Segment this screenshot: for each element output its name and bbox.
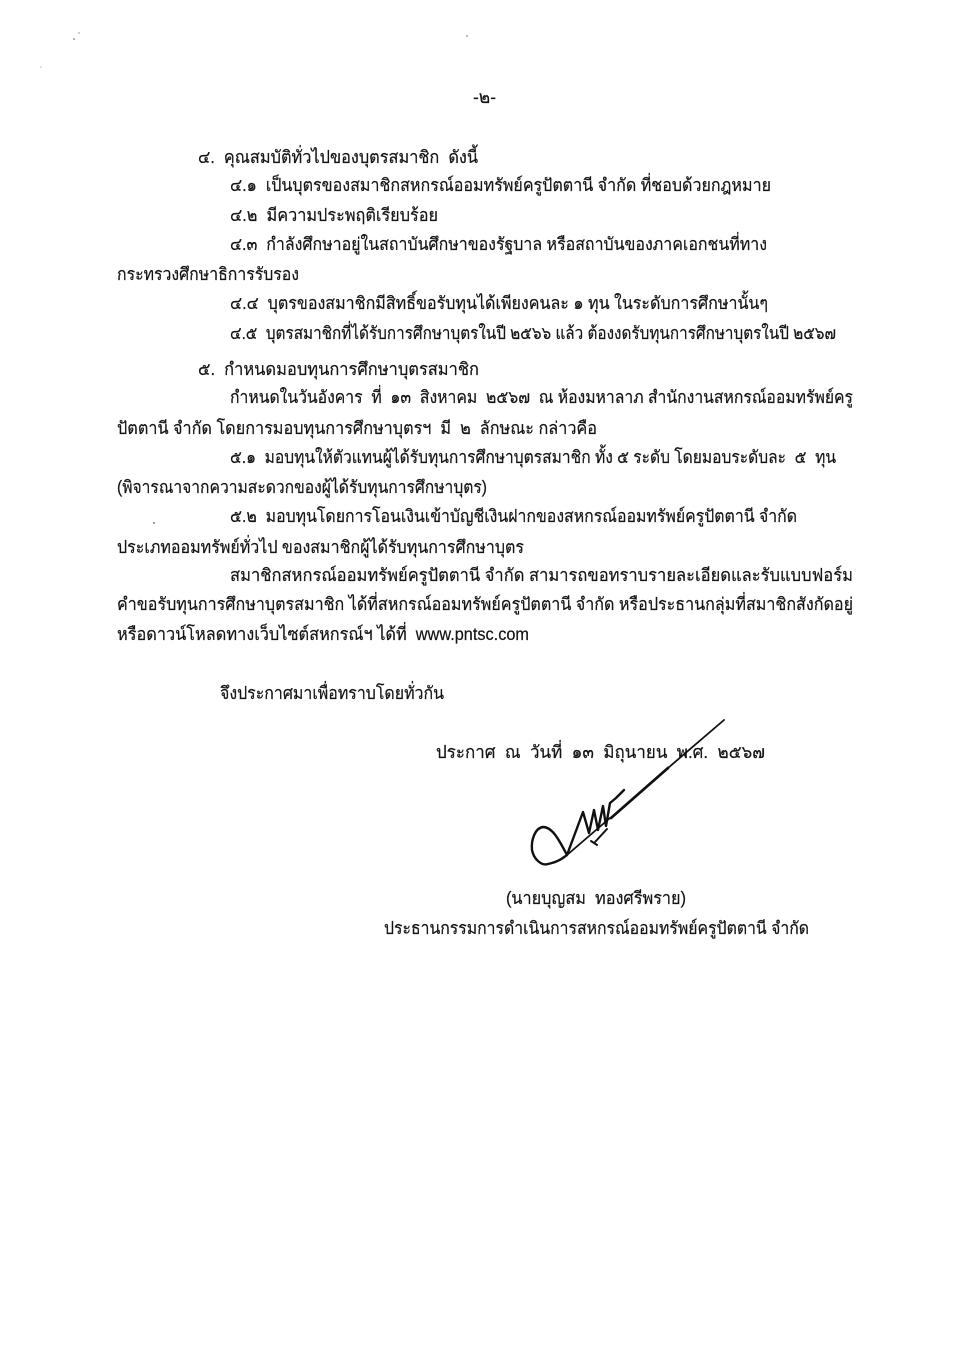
section 4: general qualifications [117,144,836,344]
item 4.3: ๔.๓ กำลังศึกษาอยู่ในสถาบันศึกษาของรัฐบาล หรือสถาบันของภาคเอกชนที่ทาง [230,232,767,255]
award date paragraph line 1: กำหนดในวันอังคาร ที่ ๑๓ สิงหาคม ๒๕๖๗ ณ ห้องมหาลาภ สำนักงานสหกรณ์ออมทรัพย์ครู [230,385,853,408]
signatory title: ประธานกรรมการดำเนินการสหกรณ์ออมทรัพย์ครูปัตตานี จำกัด [384,918,809,939]
page number: -๒- [473,87,496,107]
item 4.5: ๔.๕ บุตรสมาชิกที่ได้รับการศึกษาบุตรในปี ๒๕๖๖ แล้ว ต้องงดรับทุนการศึกษาบุตรในปี ๒๕๖๗ [230,321,836,344]
item 5.1 continued: (พิจารณาจากความสะดวกของผู้ได้รับทุนการศึกษาบุตร) [117,477,487,498]
signatory name: (นายบุญสม ทองศรีพราย) [506,888,686,909]
item 4.1: ๔.๑ เป็นบุตรของสมาชิกสหกรณ์ออมทรัพย์ครูปัตตานี จำกัด ที่ชอบด้วยกฎหมาย [230,173,771,196]
award date paragraph line 2: ปัตตานี จำกัด โดยการมอบทุนการศึกษาบุตรฯ มี ๒ ลักษณะ กล่าวคือ [117,418,597,439]
closing statement: จึงประกาศมาเพื่อทราบโดยทั่วกัน [220,681,444,703]
section 5 heading: ๕. กำหนดมอบทุนการศึกษาบุตรสมาชิก [198,359,479,380]
item 4.2: ๔.๒ มีความประพฤติเรียบร้อย [230,205,438,225]
item 5.1: ๕.๑ มอบทุนให้ตัวแทนผู้ได้รับทุนการศึกษาบุตรสมาชิก ทั้ง ๕ ระดับ โดยมอบระดับละ ๕ ทุน [230,444,836,468]
item 5.2: ๕.๒ มอบทุนโดยการโอนเงินเข้าบัญชีเงินฝากของสหกรณ์ออมทรัพย์ครูปัตตานี จำกัด [230,506,797,527]
item 5.2 continued: ประเภทออมทรัพย์ทั่วไป ของสมาชิกผู้ได้รับทุนการศึกษาบุตร [117,535,524,558]
contact information paragraph [117,565,853,644]
item 4.3 continued: กระทรวงศึกษาธิการรับรอง [117,264,299,284]
contact information paragraph: หรือดาวน์โหลดทางเว็บไซต์สหกรณ์ฯ ได้ที่ www.pntsc.com [117,622,529,644]
section 5: scholarship award schedule [117,359,853,558]
contact information paragraph: สมาชิกสหกรณ์ออมทรัพย์ครูปัตตานี จำกัด สามารถขอทราบรายละเอียดและรับแบบฟอร์ม [230,565,853,586]
signature [532,720,724,864]
section 4 heading: ๔. คุณสมบัติทั่วไปของบุตรสมาชิก ดังนี้ [198,144,478,168]
item 4.4: ๔.๔ บุตรของสมาชิกมีสิทธิ์ขอรับทุนได้เพียงคนละ ๑ ทุน ในระดับการศึกษานั้นๆ [230,290,768,314]
contact information paragraph: คำขอรับทุนการศึกษาบุตรสมาชิก ได้ที่สหกรณ์ออมทรัพย์ครูปัตตานี จำกัด หรือประธานกลุ่มที่สมาชิกสังกัดอยู่ [117,592,853,615]
announcement date: ประกาศ ณ วันที่ ๑๓ มิถุนายน พ.ศ. ๒๕๖๗ [436,740,765,763]
